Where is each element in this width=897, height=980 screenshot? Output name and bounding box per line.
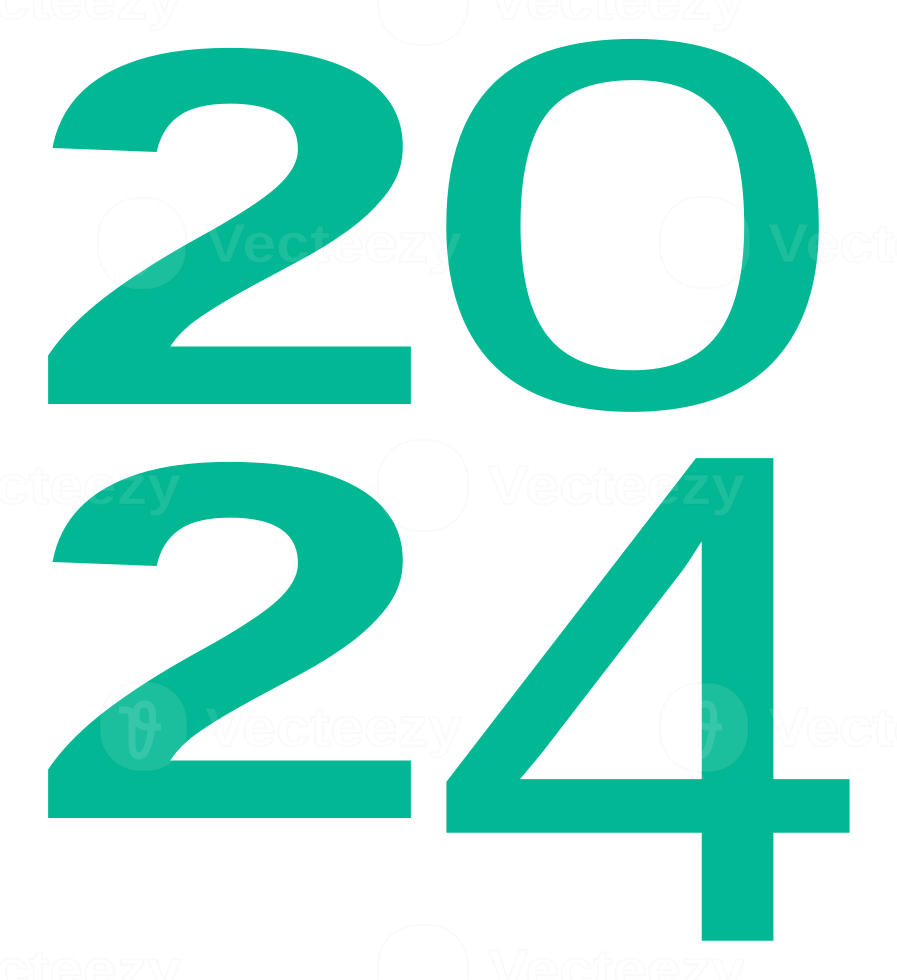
watermark: repeated Vecteezy marks: Vecteezy — [488, 454, 745, 516]
numeral: 2 bottom left: 2 — [22, 357, 441, 927]
watermark: repeated Vecteezy marks: Vecteezy — [205, 212, 462, 274]
watermark: repeated Vecteezy marks: Vecteezy — [205, 696, 462, 758]
